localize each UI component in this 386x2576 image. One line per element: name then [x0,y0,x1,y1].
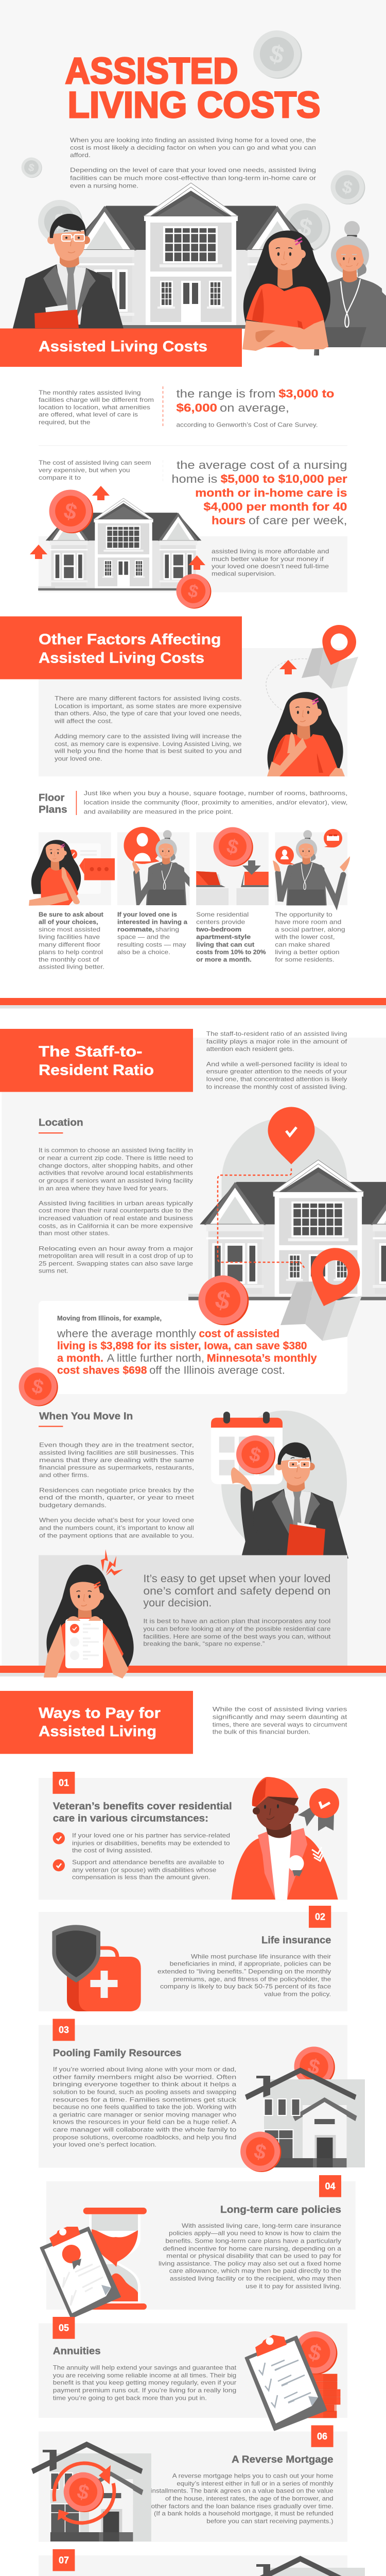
panel 06: reverse mortgage [31,2426,347,2542]
panel: easy to get upset: facilities. Here are some of the best ways you can, without [143,1633,331,1640]
panel: easy to get upset: your decision. [143,1597,212,1609]
illustration: man with calendar [211,1411,348,1565]
text: ask about choices: Be sure to ask about [39,911,103,918]
checklist: veteran's benefits: any veteran (or spouse) with disabilities whose [72,1866,217,1873]
text: shared living: living a better option [275,948,340,956]
text: long-term care: defined incentive for home care nursing, depending on a [163,2245,341,2252]
text: when you move in: budgetary demands. [39,1501,107,1509]
heading: veteran's benefits: Veteran’s benefits cover residential [53,1801,232,1812]
text: location [39,1147,193,1275]
text: roommate: roommate, [117,926,154,933]
text: ways to pay intro: the bulk of this financial burden. [213,1728,310,1735]
text: two-bedroom [196,911,266,963]
section heading band: staff ratio: The Staff-to- [39,1044,142,1060]
illustration: house [56,183,326,329]
illustration: old woman [314,221,386,358]
text: long-term care: benefits. Some long-term care plans have a particularly [165,2237,341,2244]
text: ways to pay intro: While the cost of assisted living varies [213,1705,347,1713]
text: annuities: benefit is that you keep getting money regularly, even if your [53,2379,236,2386]
panel: more affordable: much better value for your money if [212,555,324,563]
text: ways to pay intro: times, there are several ways to circumvent [213,1721,347,1728]
text: shared living: can make shared [275,941,330,948]
section heading band: other factors: Other Factors Affecting [39,632,221,648]
heading: pooling: Pooling Family Resources [53,2048,181,2059]
text: cost of assisted living: compare it to [39,474,81,481]
heading: floor plans: Floor [39,793,65,804]
text: reverse mortgage: (If a bank holds a household mortgage, it must be refunded [154,2510,334,2517]
text: shared living: have more room and [275,918,341,925]
text: location: activities that revolve around local establishments [39,1170,193,1177]
intro text: even a nursing home. [70,182,138,190]
checklist: veteran's benefits: compensation is less than the amount given. [72,1873,210,1880]
heading: reverse mortgage: A Reverse Mortgage [232,2454,334,2465]
heading: floor plans: Plans [39,805,67,816]
callout: range of costs: according to Genworth’s Cost of Care Survey. [176,421,318,429]
text: location: Relocating even an hour away from a major [39,1245,193,1252]
illustration: man with folder [10,214,127,340]
text: staff ratio: attention each resident gets. [206,1045,294,1053]
number tag 06 [311,2426,334,2447]
icon: grey coin behind man [38,200,83,244]
section heading band: assisted living costs [0,329,242,367]
callout card: moving from Illinois: a month. [57,1352,103,1364]
section heading band: assisted living costs: Assisted Living Costs [39,338,207,355]
text: location: Assisted living facilities in urban areas typically [39,1199,193,1207]
section heading band: ways to pay [0,1691,193,1754]
number tag 03 [52,2019,75,2041]
heading: long-term care: Long-term care policies [220,2205,341,2215]
text: factors: than others. Also, the type of care that your loved one needs, [55,710,242,717]
illustration: house, route and pins [188,1107,386,1300]
text: factors: your loved one. [55,755,102,762]
panel: roommate [117,827,193,905]
text: pooling: knows the resources in your field can be a huge relief. A [53,2119,236,2126]
intro text: cost is most likely a deciding factor on when you can go and what you can [70,144,316,151]
text: pooling: care manager will collaborate with the whole family to [53,2126,237,2133]
text: staff ratio: The staff-to-resident ratio of an assisted living [206,1030,347,1038]
panel: more affordable [39,536,347,592]
checklist: veteran's benefits: injuries or disabilities, benefits may be extended to [72,1839,230,1846]
section heading band: staff ratio [0,1029,193,1092]
text: pooling: bringing everyone together to think about it helps a [53,2080,237,2088]
panel: shared living [273,829,350,905]
section: staff-to-resident ratio [0,1029,386,1666]
callout card: moving from Illinois: A little further north, [107,1352,204,1364]
panel: ask about choices [29,833,115,906]
text: when you move in: assisted living facilities are still businesses. This [39,1449,194,1456]
checklist: veteran's benefits: If your loved one or his partner has service-related [72,1832,230,1839]
text: floor plans: Just like when you buy a house, square footage, number of rooms, bathrooms, [84,789,347,796]
hero section [0,0,386,340]
text: pooling [53,2066,237,2148]
text: cost of assisted living: very expensive, but when you [39,467,130,474]
text: location: cost more than their rural counterparts due to the [39,1207,193,1214]
text: annuities: payment premium runs out. If you’re living for a really long [53,2386,236,2394]
callout card: moving from Illinois: living is $3,898 for its sister, Iowa, can save $380 [57,1340,307,1352]
panel 04: long-term care policies [41,2175,356,2318]
text: reverse mortgage: before you can start receiving payments.) [206,2517,334,2524]
text: long-term care [159,2222,341,2290]
illustration: house with circular arrows and coin [31,2442,151,2541]
panel 07: renting your home [39,2549,365,2576]
text: reverse mortgage: other factors and the loan balance rises gradually over time. [151,2503,334,2510]
intro text: When you are looking into finding an assisted living home for a loved one, the [70,137,316,144]
text: ask about choices: plans to help control [39,948,103,956]
text: shared living: The opportunity to [275,911,332,918]
callout: range of costs: $6,000 [176,401,217,414]
illustration: map, pin and arrow [266,620,361,711]
text: cost of assisted living [39,459,151,481]
text: when you move in: and the numbers count, it’s important to know all [39,1524,194,1531]
text: long-term care: policies apply—all you need to know is how to claim the [169,2230,341,2237]
text: factors: cost, as memory care is expensive. Loving Assisted Living, we [55,740,242,748]
text: location: than most other states. [39,1229,110,1236]
text: long-term care: assisted living facility or to the recipient, who may then [170,2275,341,2282]
heading: life insurance: Life insurance [261,1935,331,1946]
text: ask about choices: the monthly cost of [39,956,99,963]
illustration: upset woman with checklist [44,1549,134,1679]
text: pooling: If you’re worried about living alone with your mom or dad, [53,2066,236,2073]
text: pooling: because no one feels qualified to take the job. Working with [53,2103,236,2110]
text: reverse mortgage: A reverse mortgage helps you to cash out your home [172,2472,334,2479]
text: factors: Adding memory care to the assisted living will increase the [55,733,242,740]
text: long-term care: use it to pay for assisted living. [245,2282,341,2290]
text: staff ratio: to increase the monthly cost of assisted living. [206,1083,347,1090]
text: pooling: propose solutions, overcome roadblocks, and help you find [53,2134,236,2141]
number tag 04 [319,2175,341,2197]
checklist: veteran's benefits [53,1832,230,1880]
text: cost of assisted living: The cost of assisted living can seem [39,459,151,466]
callout card: moving from Illinois: where the average monthly [57,1328,197,1340]
text: life insurance: beneficiaries in mind, if appropriate, policies can be [170,1960,331,1967]
checklist: veteran's benefits: the cost of living assisted. [72,1846,152,1854]
illustration: woman with arms crossed [242,230,330,351]
text: location: change doctors, alter shopping habits, and other [39,1162,193,1170]
text: two-bedroom: apartment-style [196,934,251,941]
panel background [39,648,347,776]
text: floor plans [84,789,347,815]
text: location: costs, as in California it can be more expensive [39,1222,193,1229]
callout: nursing home costs: of care per week, [249,514,347,527]
section: other factors [0,616,361,971]
callout: nursing home costs: $5,000 to $10,000 per [221,472,347,485]
text: roommate: also be a choice. [117,948,170,956]
text: factors [54,694,242,762]
text: location: or near a current zip code. There is little need to [39,1154,193,1161]
text: location: in an area where they have lived for years. [39,1185,168,1192]
text: location: sums net. [39,1267,68,1275]
illustration: map, pin and coins [19,1241,366,1406]
panel: easy to get upset: It’s easy to get upset when your loved [143,1573,330,1585]
panel: two-bedroom apartment [196,827,269,905]
callout: range of costs: on average, [220,401,289,414]
heading: when you move in: When You Move In [39,1411,133,1422]
title: LIVING COSTS [68,85,320,126]
panel: more affordable: assisted living is more affordable and [212,548,329,555]
text: two-bedroom: living that can cut [196,941,254,948]
text: location: increased valuation of real estate and business [39,1215,193,1222]
text: staff ratio: And while a well-personed facility is ideal to [206,1060,347,1067]
callout: nursing home costs: home is [171,472,217,485]
text: when you move in: financial pressure as supermarkets, restaurants, [39,1464,194,1471]
illustration: woman thinking [267,692,345,776]
number tag 01: 01 [59,1777,69,1788]
text: staff ratio: ensure greater attention to the needs of your [206,1067,347,1075]
text: reverse mortgage: equity’s interest either in full or in a series of monthly [177,2480,334,2487]
illustration: house with rent sign [245,2556,365,2576]
heading: location [39,1117,83,1133]
text: pooling: resources for a time. Families sometimes get stuck [53,2096,237,2103]
icon: grey coin behind house [282,204,330,252]
text: annuities: time you’re going to get back more than you put in. [53,2395,207,2402]
callout: nursing home costs: hours [212,514,245,527]
number tag 02: 02 [315,1911,325,1922]
text: two-bedroom: or more a month. [196,956,252,963]
illustration: house with coins [240,2046,365,2172]
text: when you move in: of the payment options that are available to you. [39,1532,194,1539]
checklist: veteran's benefits: Support and attendance benefits are available to [72,1859,224,1866]
heading: floor plans [39,793,67,816]
callout card: moving from Illinois: Minnesota’s monthly [207,1352,317,1364]
icon: grey coin small [22,158,42,178]
heading: annuities: Annuities [53,2346,101,2357]
text: staff ratio: loved one, that concentrated attention is likely [206,1076,347,1083]
text: life insurance: value from the policy. [264,1991,331,1998]
text: long-term care: With assisted living care, long-term care insurance [182,2222,341,2229]
text: pooling: other family members might also be worried. Often [53,2073,236,2080]
text: pooling: a geriatric care manager or senior moving manager who [53,2111,237,2119]
callout: nursing home costs: month or in-home care is [195,486,347,499]
panel: easy to get upset: breaking the bank, “spare no expense.” [143,1640,265,1648]
text: reverse mortgage [151,2472,334,2524]
text: monthly rates: facilities charge will be different from [39,396,154,403]
section heading band: staff ratio: Resident Ratio [39,1062,154,1079]
text: life insurance: premiums, age, and fitness of the policyholder, the [173,1975,331,1982]
intro text: Depending on the level of care that your loved one needs, assisted living [70,166,316,174]
text: factors: Location is important, as some states are more expensive [55,703,242,710]
text: shared living: for some residents. [275,956,335,963]
panel: more affordable: your loved one doesn’t need full-time [212,563,329,570]
text: ways to pay intro: significantly and may seem daunting at [213,1714,347,1721]
text: monthly rates [39,389,154,426]
text: factors: will help you find the home that is best suited to you and [54,747,242,754]
text: when you move in: means that they are dealing with the same [39,1456,194,1464]
icon: grey coin right [330,170,365,205]
callout: nursing home costs: $4,000 per month for 40 [204,500,347,513]
text: long-term care: mental or physical disability that can be used to pay for [166,2252,341,2260]
text: two-bedroom: two-bedroom [196,926,241,933]
illustration: veteran with medal [232,1777,339,1900]
number tag 01 [52,1772,75,1794]
text: shared living: with the lower cost, [274,934,335,941]
text: floor plans: location inside the community (floor, proximity to amenities, and/or elevator), view, [84,799,347,806]
heading: location: Location [39,1117,83,1128]
text: location: or groups if seniors want an assisted living facility [39,1177,193,1184]
intro text [70,137,316,190]
number tag 05: 05 [59,2323,69,2333]
text: annuities [53,2364,237,2402]
text: life insurance: extended to “living benefits.” Depending on the monthly [157,1968,331,1975]
callout: range of costs [176,387,334,429]
section heading band: ways to pay: Ways to Pay for [39,1705,161,1722]
number tag 06: 06 [317,2431,327,2442]
title: ASSISTED [65,51,238,92]
text: roommate: interested in having a [117,918,187,925]
text: factors: There are many different factors for assisted living costs. [55,694,242,702]
text: ways to pay intro [213,1705,347,1735]
text: monthly rates: The monthly rates assisted living [39,389,141,396]
text: when you move in: Residences can negotiate price breaks by the [39,1487,194,1494]
callout card: moving from Illinois [39,1301,347,1394]
text: pooling: your loved one’s perfect location. [53,2141,156,2148]
callout card: moving from Illinois: Moving from Illinois, for example, [57,1314,162,1322]
text: monthly rates: location to location, what amenities [39,404,150,411]
section heading band: other factors: Assisted Living Costs [39,650,204,667]
illustration: first aid kit and shield [52,1925,141,2011]
panel: easy to get upset: It is best to have an action plan that incorporates any tool [143,1618,330,1625]
text: annuities: you are receiving some reliable income at all times. Their big [53,2372,236,2379]
text: monthly rates: are offered, what level of care is [39,411,138,418]
text: roommate: If your loved one is [117,911,177,918]
text: ask about choices [39,911,104,971]
illustration: house with coins and arrows [30,486,211,608]
intro text: facilities can be much more cost-effective than long-term in-home care or [70,174,316,181]
heading: veteran's benefits: care in various circumstances: [53,1814,208,1824]
text: long-term care: living assistance. The policy may also set out a fixed home [159,2260,341,2267]
callout: range of costs: $3,000 to [278,387,334,400]
callout card: moving from Illinois: cost shaves $698 [57,1365,147,1377]
text: life insurance: company is likely to buy back 50-75 percent of its face [160,1982,331,1990]
text: shared living: a social partner, along [275,926,345,933]
panel: easy to get upset [39,1555,347,1666]
callout: range of costs: the range is from [176,387,276,400]
number tag 07: 07 [59,2555,69,2566]
text: when you move in: Even though they are in the treatment sector, [39,1442,194,1449]
text: location: It is common to choose an assisted living facility in [39,1147,193,1154]
text: ask about choices: living facilities have [39,934,100,941]
text: reverse mortgage: of the house, interest rates, the age of the borrower, and [165,2495,334,2502]
text: life insurance: While most purchase life insurance with their [191,1953,331,1960]
text: pooling: solution to be found, such as pooling assets and swapping [53,2089,236,2096]
panel: more affordable: medical supervision. [212,570,276,577]
text: monthly rates: required, but the [39,418,91,426]
text: when you move in: and other firms. [39,1471,89,1479]
callout card: moving from Illinois: off the Illinois average cost. [149,1365,285,1377]
callout: nursing home costs: the average cost of a nursing [177,459,347,471]
text: factors: will affect the cost. [54,717,113,724]
text: ask about choices: since most assisted [39,926,100,933]
text: ask about choices: many different floor [39,941,100,948]
illustration: hourglass and clipboard [41,2208,147,2318]
text: floor plans: and availability are measured in the price point. [84,808,233,815]
text: staff ratio [206,1030,347,1090]
text: two-bedroom: costs from 10% to 20% [196,948,266,956]
panel 05: annuities [39,2317,347,2430]
text: two-bedroom: Some residential [196,911,249,918]
text: roommate: resulting costs — may [117,941,186,948]
number tag 04: 04 [325,2181,336,2192]
text: location: metropolitan area will result in a cost drop of up to [39,1252,193,1259]
text: two-bedroom: centers provide [196,918,245,925]
intro text: afford. [70,151,91,159]
panel: easy to get upset: one’s comfort and safety depend on [143,1585,330,1597]
title [65,51,320,126]
text: when you move in [39,1442,195,1539]
text: location: 25 percent. Swapping states can also save large [39,1260,193,1267]
number tag 05 [52,2317,75,2339]
callout: nursing home costs [171,459,347,527]
icon: grey coin large [253,30,302,79]
text: ask about choices: all of your choices, [39,918,98,925]
number tag 07 [52,2549,75,2571]
text: roommate: sharing [155,926,179,933]
section: cost comparison [30,386,347,608]
number tag 03: 03 [59,2025,69,2035]
text: roommate [117,911,187,956]
panel: easy to get upset: you can before looking at any of the possible residential care [143,1625,331,1632]
number tag 02 [309,1906,331,1928]
illustration: clipboard and coin stack [245,2331,340,2430]
section heading band: other factors [0,616,242,679]
text: roommate: space — and the [117,934,170,941]
text: annuities: The annuity will help extend your savings and guarantee that [53,2364,237,2371]
section heading band: ways to pay: Assisted Living [39,1723,156,1740]
text: reverse mortgage: installments. The bank agrees on a value based on the value [151,2487,334,2495]
panel 02: life insurance [39,1906,347,2011]
text: ask about choices: assisted living better. [39,963,104,971]
text: life insurance [157,1953,331,1998]
text: long-term care: care allowance, which may then be paid directly to the [169,2267,341,2274]
panel 01: veteran's benefits [39,1772,347,1900]
text: shared living [274,911,345,963]
panel 03: pooling family resources [39,2019,365,2172]
heading: veteran's benefits [53,1801,232,1824]
text: when you move in: end of the month, quarter, or year to meet [39,1494,195,1501]
text: when you move in: When you decide what’s best for your loved one [39,1517,194,1524]
callout card: moving from Illinois: cost of assisted [199,1328,279,1340]
text: staff ratio: facility plays a major role in the amount of [206,1038,347,1045]
